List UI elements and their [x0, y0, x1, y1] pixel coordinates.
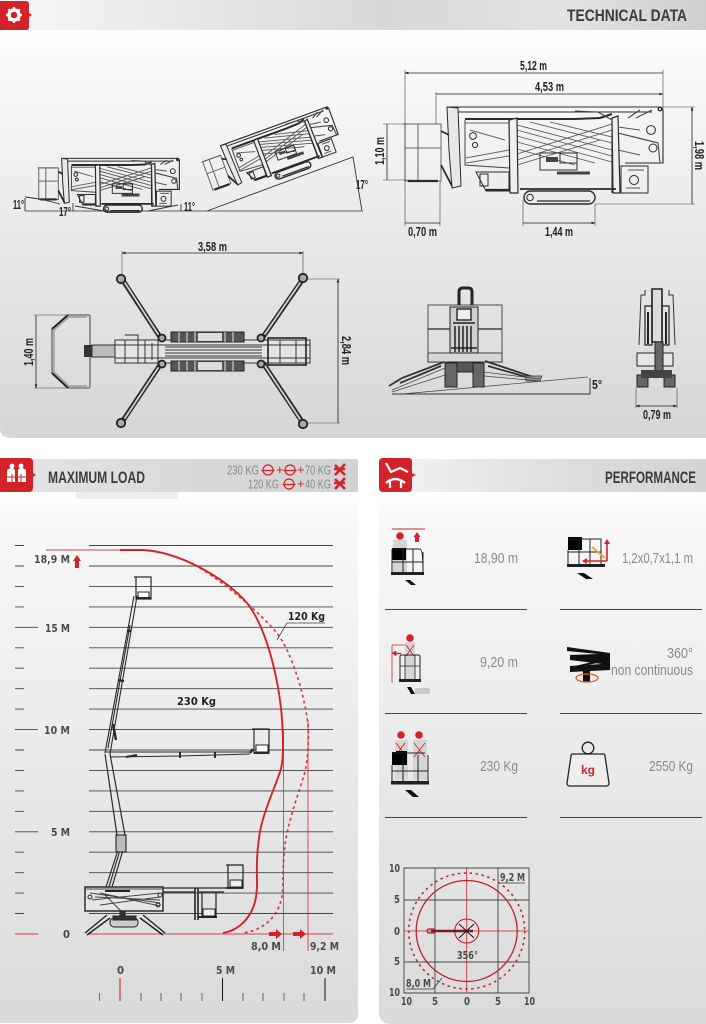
technical data panel background — [0, 30, 706, 438]
y axis labels: 5 M — [51, 827, 70, 839]
load legend: 230 KG — [227, 462, 259, 478]
maximum load header bar — [20, 459, 358, 492]
arrows: outreach — [269, 929, 306, 939]
label: 9,2 m: 9,2 M — [310, 941, 339, 953]
metric: load — [391, 731, 518, 797]
performance panel background — [379, 492, 706, 1024]
metric: basket dimensions — [567, 537, 693, 579]
curve: 230 kg envelope — [120, 550, 283, 933]
drawing: side view with dimensions: 1,10 m — [373, 137, 387, 165]
load legend: + — [276, 462, 284, 477]
drawing: side view with dimensions: 1,44 m — [545, 225, 573, 239]
polar labels — [389, 863, 535, 1008]
drawing: top view with dimensions: 1,40 m — [22, 338, 36, 366]
polar labels: 0 — [394, 926, 400, 938]
y axis labels: 15 M — [45, 623, 70, 635]
drawing: side view with dimensions: 0,70 m — [408, 225, 437, 239]
panel: maximum load — [0, 458, 358, 1023]
drawing: top view with dimensions — [22, 240, 353, 428]
drawing: side view with dimensions: 4,53 m — [535, 80, 564, 94]
polar labels: 10 — [524, 996, 535, 1008]
metric: rotation: 360° — [667, 646, 693, 662]
y axis labels: 18,9 M — [34, 554, 70, 566]
x axis: 0 — [117, 965, 124, 977]
icon: height — [391, 529, 425, 585]
icon: rotation — [567, 647, 610, 682]
drawing: rear view with width dimension — [636, 289, 677, 422]
drawing: front view with 5 degree slope: 5° — [592, 378, 602, 392]
polar axes — [404, 868, 529, 993]
load legend: + — [297, 476, 305, 491]
boom: lower arm — [105, 754, 126, 887]
polar labels: 9,2 M — [500, 872, 525, 884]
polar labels: 5 — [394, 894, 400, 906]
maximum load panel background — [0, 492, 358, 1023]
drawing: side view with dimensions: 5,12 m — [520, 59, 547, 73]
polar labels: 5 — [394, 956, 400, 968]
boom: raised position — [105, 577, 151, 754]
polar labels: 5 — [432, 996, 438, 1008]
metric: machine weight: 2550 Kg — [649, 759, 693, 775]
drawing: machine on 17 degree slope — [199, 107, 368, 211]
zero and maximum height lines — [15, 550, 333, 951]
load legend — [227, 462, 345, 492]
polar labels: 0 — [464, 996, 470, 1008]
faint tab under header — [76, 492, 178, 499]
icon: weight: kg — [581, 763, 595, 777]
icon: two persons badge — [0, 458, 36, 492]
polar labels: 10 — [389, 987, 400, 999]
label: 120 kg: 120 Kg — [288, 611, 325, 623]
polar labels: 8,0 M — [406, 978, 431, 990]
drawing: side view with dimensions — [373, 59, 706, 239]
separators — [385, 610, 702, 818]
curve: 120 kg envelope — [195, 565, 308, 933]
grid lines — [15, 546, 333, 914]
y axis labels — [34, 554, 70, 941]
drawing: top view with dimensions: 2,84 m — [339, 336, 353, 365]
drawing: level machine with slope angles: 17° — [59, 205, 71, 219]
performance header bar — [395, 459, 706, 492]
drawing: machine on 17 degree slope: 17° — [356, 178, 368, 192]
drawing: front view with 5 degree slope — [389, 288, 602, 394]
technical data header bar — [0, 0, 706, 30]
metric: working height — [391, 529, 518, 585]
polar envelope: 8,0 m — [416, 880, 517, 982]
x axis: 5 M — [216, 965, 235, 977]
drawing: top view with dimensions: 3,58 m — [198, 240, 227, 254]
load legend: 70 KG — [305, 462, 331, 478]
machine base in chart — [85, 887, 165, 935]
drawing: level machine with slope angles: 11° — [184, 200, 195, 214]
drawing: level machine with slope angles — [13, 158, 363, 219]
polar boom — [427, 924, 474, 938]
load legend: + — [297, 462, 305, 477]
y axis labels: 10 M — [44, 725, 70, 737]
polar labels: 10 — [401, 996, 412, 1008]
panel: performance — [379, 458, 706, 1024]
metric: machine weight — [567, 742, 693, 786]
boom: horizontal position — [105, 729, 269, 758]
icon: outreach — [392, 634, 430, 694]
y axis labels: 0 — [63, 929, 70, 941]
icon: boom badge — [379, 458, 416, 492]
label: 230 kg: 230 Kg — [177, 696, 216, 708]
metric: load: 230 Kg — [480, 759, 518, 775]
x axis: 10 M — [310, 965, 336, 977]
polar labels: 5 — [495, 996, 501, 1008]
leader: 120 kg — [277, 623, 325, 640]
metric: outreach — [392, 634, 518, 694]
load chart — [15, 546, 339, 1001]
boom: low position and baskets — [163, 865, 243, 920]
arrow: maximum height — [73, 555, 81, 568]
metric: outreach: 9,20 m — [480, 655, 518, 671]
load legend: 40 KG — [305, 476, 331, 492]
label: 8,0 m: 8,0 M — [251, 941, 281, 953]
load legend: 120 KG — [248, 476, 279, 492]
polar labels: 10 — [389, 863, 400, 875]
icon: basket size — [567, 537, 610, 579]
polar envelope: centre — [455, 919, 479, 943]
drawing: level machine with slope angles: 11° — [13, 198, 24, 212]
heading: maximum load: MAXIMUM LOAD — [48, 468, 145, 487]
polar working area chart — [389, 863, 535, 1008]
x axis — [100, 965, 336, 1001]
drawing: side view with dimensions: 1,98 m — [692, 141, 706, 170]
metric: working height: 18,90 m — [474, 551, 518, 567]
icon: two persons in basket — [391, 731, 429, 797]
polar envelope: 9,2 m — [409, 873, 525, 989]
icon: gear badge — [0, 1, 32, 30]
polar labels: 356° — [457, 950, 478, 962]
polar grid — [404, 868, 529, 993]
metric: rotation — [567, 646, 693, 682]
drawing: rear view with width dimension: 0,79 m — [643, 408, 671, 422]
panel: technical data — [0, 0, 706, 438]
